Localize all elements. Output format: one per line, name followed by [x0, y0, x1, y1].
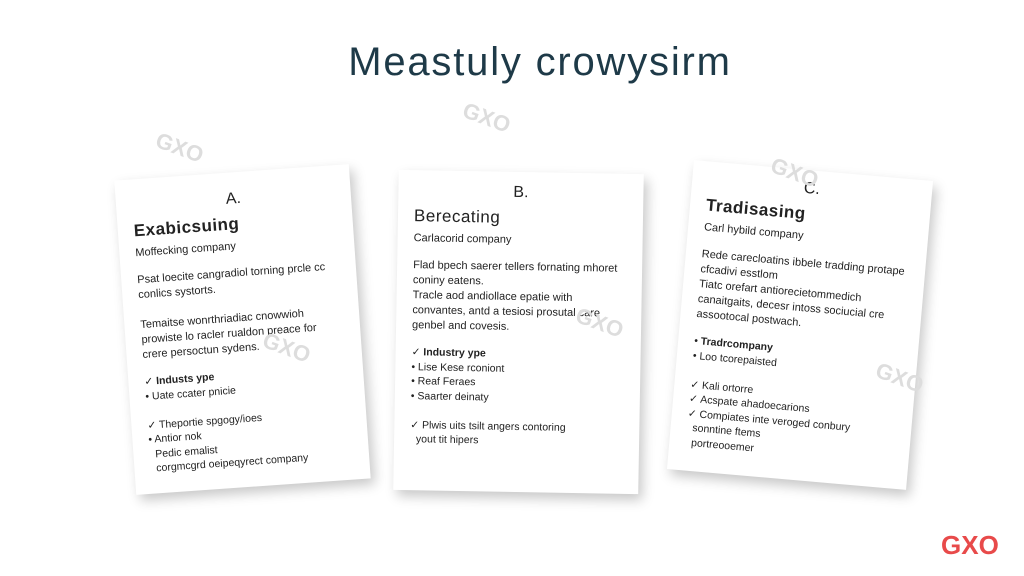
card C label: C.: [803, 180, 821, 198]
card C bullets: ✓ Kali ortorre: [690, 378, 754, 396]
watermark: GXO: [767, 152, 822, 193]
card B text: [412, 259, 618, 333]
card A text: [137, 261, 326, 361]
card B bullets: • Reaf Feraes: [411, 375, 476, 388]
panel: card A: [114, 164, 371, 495]
card C heading: Tradisasing: [705, 195, 807, 223]
card A heading: Exabicsuing: [133, 214, 240, 240]
card B subtitle: Carlacorid company: [414, 232, 512, 246]
card C text: [696, 248, 905, 329]
card C text: Rede carecloatins ibbele tradding protape cfcadivi esstlom: [700, 248, 905, 282]
card A bullets: corgmcgrd oeipeqyrect company: [156, 452, 309, 474]
card A bullets: [144, 371, 309, 474]
card B text: Tracle aod andiollace epatie with convantes, antd a tesiosi prosutal care genbel and covesis.: [412, 289, 600, 333]
card A bullets: • Uate ccater pnicie: [145, 384, 236, 402]
watermark: GXO: [459, 97, 514, 138]
card A label: A.: [225, 190, 241, 208]
card A bullets: • Antior nok: [148, 430, 202, 446]
card A subtitle: Moffecking company: [135, 240, 236, 259]
card B text: Flad bpech saerer tellers fornating mhoret coniny eatens.: [413, 259, 617, 287]
card A text: Psat loecite cangradiol torning prcle cc conlics systorts.: [137, 261, 326, 301]
card B bullets: ✓ Plwis uits tsilt angers contoring: [410, 419, 566, 433]
panel: card B: [393, 170, 644, 494]
logo: GXO: [941, 530, 999, 560]
panel: card C: [667, 160, 933, 490]
card C bullets: portreooemer: [691, 436, 755, 454]
card B bullets: ✓ Industry ype: [412, 346, 486, 359]
card C bullets: ✓ Compiates inte veroged conbury: [687, 407, 851, 433]
card B bullets: • Saarter deinaty: [411, 390, 489, 403]
card B bullets: yout tit hipers: [416, 433, 478, 446]
card B label: B.: [513, 184, 529, 201]
card A bullets: ✓ Industs ype: [144, 371, 215, 388]
watermark: GXO: [152, 127, 207, 168]
card C bullets: sonntine ftems: [692, 422, 761, 440]
card B bullets: [410, 346, 566, 446]
watermark: GXO: [259, 327, 314, 368]
card B bullets: • Lise Kese rconiont: [411, 361, 504, 374]
card A text: Temaitse wonrthriadiac cnowwioh prowiste lo racler rualdon preace for crere persoctun sydens.: [140, 308, 317, 361]
title: Meastuly crowysirm: [348, 40, 732, 84]
card C text: Tiatc orefart antiorecietommedich canaitgaits, decesr intoss sociucial cre assootocal postwach.: [696, 278, 885, 329]
card C bullets: ✓ Acspate ahadoecarions: [689, 393, 810, 415]
card A bullets: Pedic emalist: [155, 444, 218, 460]
card C bullets: [687, 335, 851, 454]
card B heading: Berecating: [414, 206, 500, 227]
card C bullets: • Tradrcompany: [694, 335, 773, 354]
card C subtitle: Carl hybild company: [704, 221, 804, 242]
card C bullets: • Loo tcorepaisted: [692, 349, 777, 369]
watermark: GXO: [572, 302, 627, 343]
watermark: GXO: [872, 357, 927, 398]
card A bullets: ✓ Theportie spgogy/ioes: [147, 411, 262, 431]
